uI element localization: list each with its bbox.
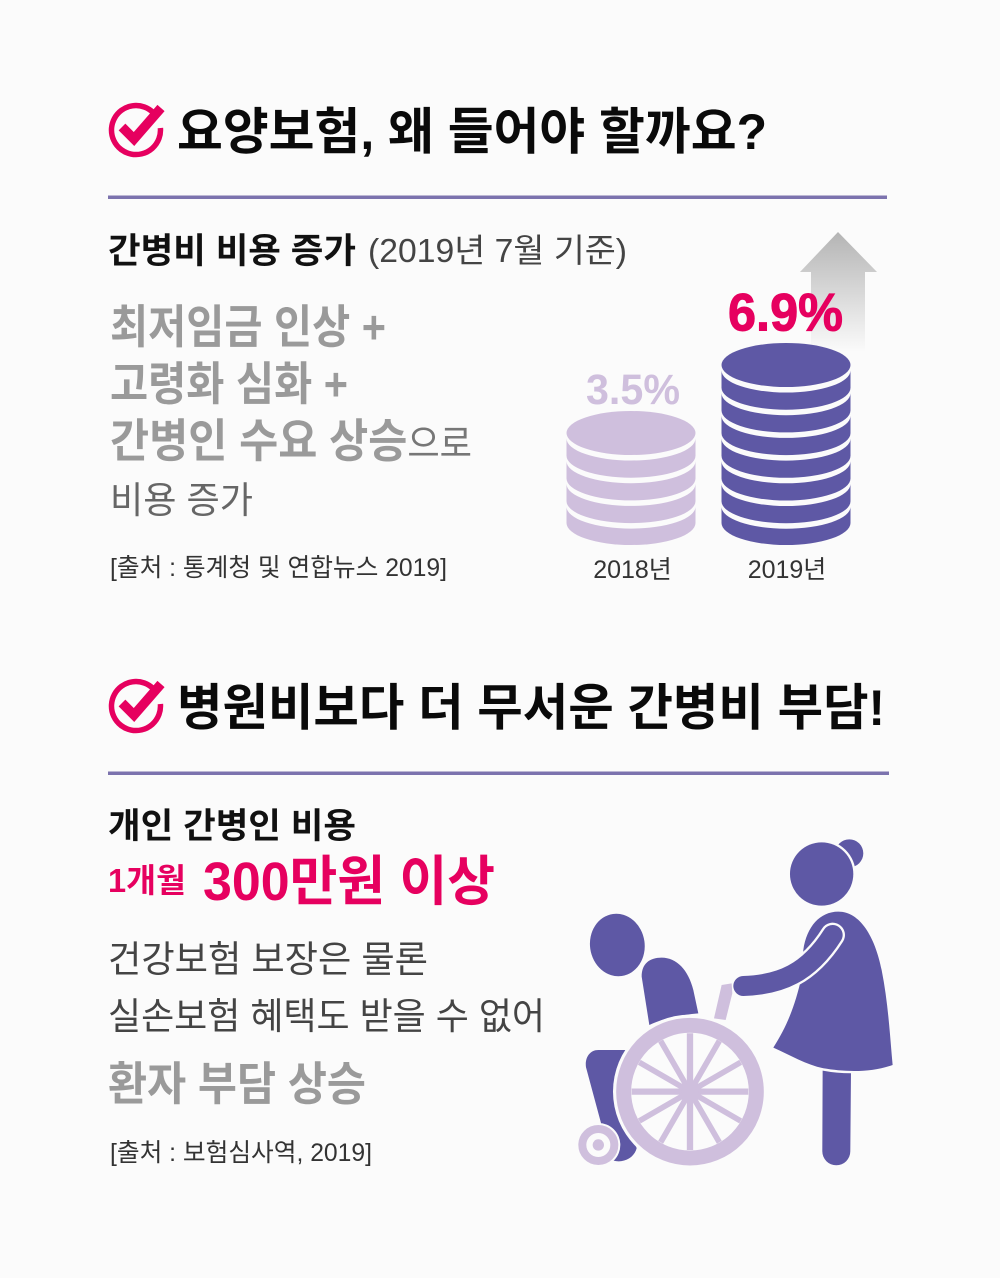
subheading: 간병비 비용 증가 — [108, 232, 356, 271]
coin stack 2018 — [566, 411, 696, 545]
text: patient burden: 환자 부담 상승 — [108, 1058, 366, 1110]
heading: 병원비보다 더 무서운 간병비 부담! — [177, 680, 885, 736]
text block: causes: 고령화 심화 + — [110, 358, 348, 410]
panel: cost increase — [108, 104, 887, 584]
patient — [586, 910, 698, 1161]
value 2018: 3.5% — [586, 366, 680, 414]
callout: monthly cost: 1개월 — [108, 862, 186, 899]
source: [출처 : 보험심사역, 2019] — [110, 1139, 372, 1167]
date note: (2019년 7월 기준) — [368, 232, 627, 269]
wheelchair — [576, 983, 767, 1169]
text block: causes — [110, 301, 472, 521]
caregiver — [743, 839, 893, 1165]
callout: monthly cost: 300만원 이상 — [203, 852, 495, 912]
text block: causes: 최저임금 인상 + — [110, 301, 386, 353]
icon: check mark — [111, 106, 161, 155]
source: [출처 : 통계청 및 연합뉴스 2019] — [110, 554, 447, 582]
text block: no coverage: 실손보험 혜택도 받을 수 없어 — [108, 996, 545, 1037]
text block: causes: 간병인 수요 상승으로 — [110, 415, 472, 467]
coin stack 2019 — [722, 343, 850, 545]
illustration: caregiver and wheelchair — [576, 839, 893, 1169]
label 2018: 2018년 — [593, 556, 672, 584]
heading: 요양보험, 왜 들어야 할까요? — [177, 104, 767, 160]
icon: check mark — [111, 682, 161, 731]
panel: care burden — [108, 680, 893, 1169]
arrow: rising — [800, 232, 877, 352]
value 2019: 6.9% — [728, 284, 843, 342]
text block: causes: 비용 증가 — [110, 480, 253, 521]
text block: no coverage — [108, 939, 545, 1037]
label 2019: 2019년 — [748, 556, 826, 584]
subheading: 개인 간병인 비용 — [108, 807, 356, 846]
text block: no coverage: 건강보험 보장은 물론 — [108, 939, 428, 980]
